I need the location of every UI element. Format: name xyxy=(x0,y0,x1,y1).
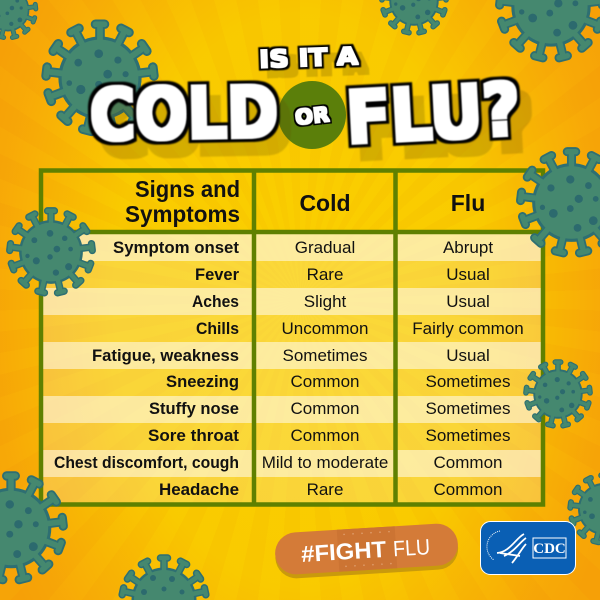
row: sore throat: Sometimes xyxy=(425,426,511,445)
row: symptom onset: Symptom onset xyxy=(113,238,239,257)
virus: left of table xyxy=(10,211,92,293)
or circle xyxy=(278,81,346,149)
row: stuffy nose: Sometimes xyxy=(425,399,511,418)
symptoms table xyxy=(41,170,543,504)
row: chills: Chills xyxy=(196,319,239,338)
row: headache xyxy=(159,480,502,499)
header: signs and symptoms xyxy=(125,176,240,227)
row: aches: Usual xyxy=(446,292,490,311)
row: sneezing: Sneezing xyxy=(166,372,239,391)
virus: top left corner xyxy=(0,0,36,37)
virus: large behind title xyxy=(46,24,154,131)
row: chest discomfort: Mild to moderate xyxy=(262,453,388,472)
virus: top centre xyxy=(382,0,446,33)
is it a text: IS IT A xyxy=(259,42,359,74)
row: fever: Usual xyxy=(446,265,490,284)
table row stripes xyxy=(42,234,541,504)
row: aches xyxy=(192,292,490,311)
virus: top right xyxy=(500,0,600,58)
virus: right lower xyxy=(526,362,590,426)
row: aches: Slight xyxy=(304,292,347,311)
row: stuffy nose: Stuffy nose xyxy=(149,399,239,418)
row: symptom onset: Abrupt xyxy=(443,238,493,257)
row: headache: Rare xyxy=(307,480,343,499)
header: flu: Flu xyxy=(451,190,485,216)
row: sore throat xyxy=(148,426,511,445)
row: chest discomfort: Chest discomfort, cough xyxy=(54,453,239,472)
cdc box: CDC xyxy=(533,541,566,557)
row: sneezing: Common xyxy=(291,372,359,391)
row: chills: Uncommon xyxy=(282,319,368,338)
row: symptom onset xyxy=(113,238,493,257)
cdc logo xyxy=(480,522,576,574)
virus: bottom centre xyxy=(122,558,206,600)
virus: bottom left xyxy=(0,476,63,580)
fight flu bandage: #FIGHT xyxy=(300,536,387,567)
cold text: COLD xyxy=(89,71,279,157)
fight flu bandage xyxy=(274,522,459,580)
row: aches: Aches xyxy=(192,292,239,311)
row: sore throat: Sore throat xyxy=(148,426,239,445)
row: sore throat: Common xyxy=(291,426,359,445)
row: sneezing: Sometimes xyxy=(425,372,511,391)
flu text: FLU? xyxy=(344,67,522,160)
row: fatigue: Usual xyxy=(446,346,490,365)
row: chest discomfort xyxy=(54,453,502,472)
row: chills: Fairly common xyxy=(412,319,524,338)
row: fever: Fever xyxy=(195,265,239,284)
virus: bottom right xyxy=(570,475,600,542)
fight flu bandage: FLU xyxy=(392,534,431,561)
row: headache: Headache xyxy=(159,480,239,499)
row: headache: Common xyxy=(434,480,502,499)
row: fever xyxy=(195,265,490,284)
row: fatigue: Sometimes xyxy=(282,346,368,365)
title heading xyxy=(89,42,522,160)
header: cold: Cold xyxy=(299,190,351,216)
row: sneezing xyxy=(166,372,511,391)
header: signs and symptoms: Signs and xyxy=(135,176,240,202)
row: chest discomfort: Common xyxy=(434,453,502,472)
row: stuffy nose xyxy=(149,399,511,418)
row: fever: Rare xyxy=(307,265,343,284)
row: stuffy nose: Common xyxy=(291,399,359,418)
row: fatigue: Fatigue, weakness xyxy=(92,346,239,365)
row: fatigue xyxy=(92,346,490,365)
hhs seal xyxy=(487,531,526,563)
row: symptom onset: Gradual xyxy=(295,238,355,257)
row: chills xyxy=(196,319,524,338)
table grid xyxy=(41,170,543,504)
header: signs and symptoms: Symptoms xyxy=(125,201,240,227)
virus: right of table xyxy=(521,152,600,253)
or text: OR xyxy=(294,102,330,130)
